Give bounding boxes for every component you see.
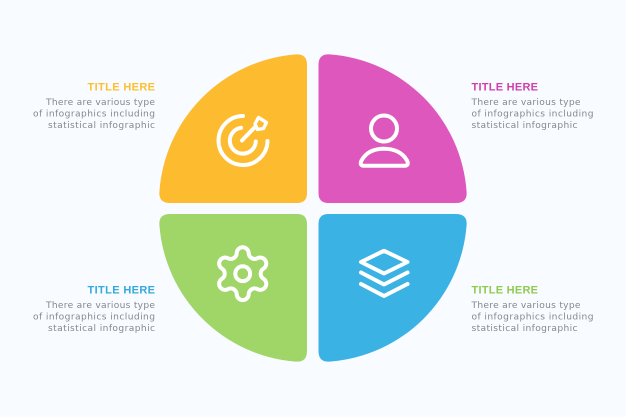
text block: bottom left: of infographics including — [33, 312, 155, 322]
icon: gear — [219, 247, 266, 300]
text block: top right — [470, 82, 594, 131]
text block: top left: of infographics including — [33, 110, 155, 120]
text block: top right: of infographics including — [472, 110, 594, 120]
text block: bottom left — [33, 284, 155, 334]
text block: top left: statistical infographic — [48, 121, 155, 131]
icon: person — [361, 116, 408, 166]
text block: bottom right: of infographics including — [472, 312, 594, 322]
text block: top left — [33, 82, 155, 131]
text block: top left: There are various type — [45, 98, 155, 108]
text block: top right: There are various type — [470, 98, 581, 108]
text block: bottom left: There are various type — [45, 301, 155, 311]
panel: green quadrant — [159, 214, 307, 362]
text block: bottom right: There are various type — [470, 301, 581, 311]
panel: yellow quadrant — [159, 54, 307, 203]
icon: target with arrow — [219, 116, 268, 165]
text block: top right: statistical infographic — [472, 121, 578, 131]
panel: blue quadrant — [318, 214, 467, 362]
panel: pink quadrant — [318, 54, 467, 203]
text block: top left: TITLE HERE — [88, 82, 155, 94]
text block: bottom right — [470, 284, 594, 334]
text block: bottom left: TITLE HERE — [88, 284, 155, 296]
text block: top right: TITLE HERE — [472, 82, 538, 94]
text block: bottom right: statistical infographic — [472, 324, 578, 334]
icon: layers — [361, 251, 408, 296]
text block: bottom left: statistical infographic — [48, 324, 155, 334]
text block: bottom right: TITLE HERE — [472, 284, 538, 296]
